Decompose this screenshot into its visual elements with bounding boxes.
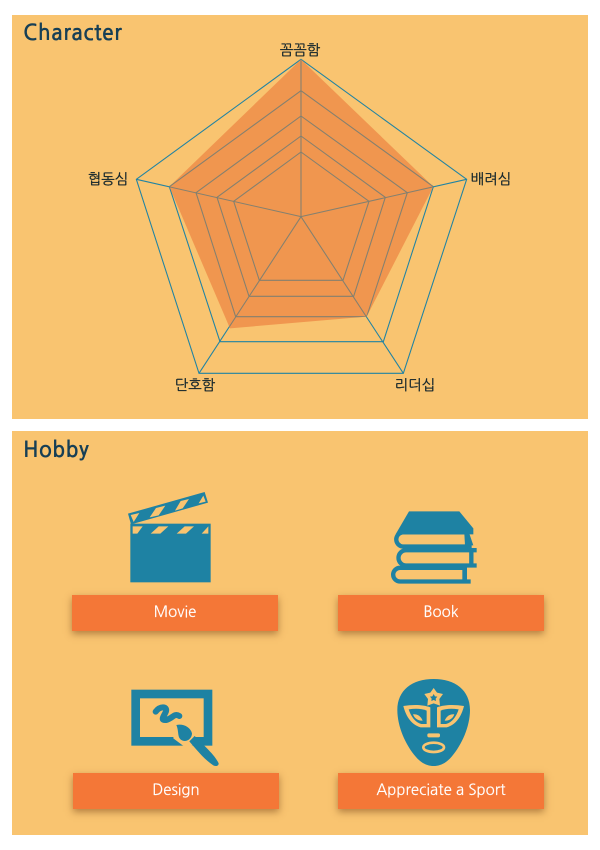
button: Book: Book [423, 605, 459, 620]
panel: character [12, 15, 588, 419]
axis labels: 리더십 [395, 378, 435, 393]
axis labels: 배려심 [471, 171, 511, 187]
button: Design [73, 773, 279, 809]
radar chart [88, 43, 511, 393]
panel: hobby [12, 431, 588, 835]
axis labels: 단호함 [175, 378, 216, 393]
button: Design: Design [152, 783, 200, 798]
heading: Hobby: Hobby [23, 440, 89, 461]
button: Movie [72, 595, 278, 631]
axis labels: 협동심 [88, 171, 128, 187]
axis labels: 꼼꼼함 [280, 43, 321, 58]
button: Appreciate a Sport: Appreciate a Sport [376, 783, 506, 798]
button: Appreciate a Sport [338, 773, 544, 809]
heading: Character: Character [23, 23, 122, 44]
button: Movie: Movie [154, 605, 196, 620]
axis labels [88, 43, 511, 393]
button: Book [338, 595, 544, 631]
